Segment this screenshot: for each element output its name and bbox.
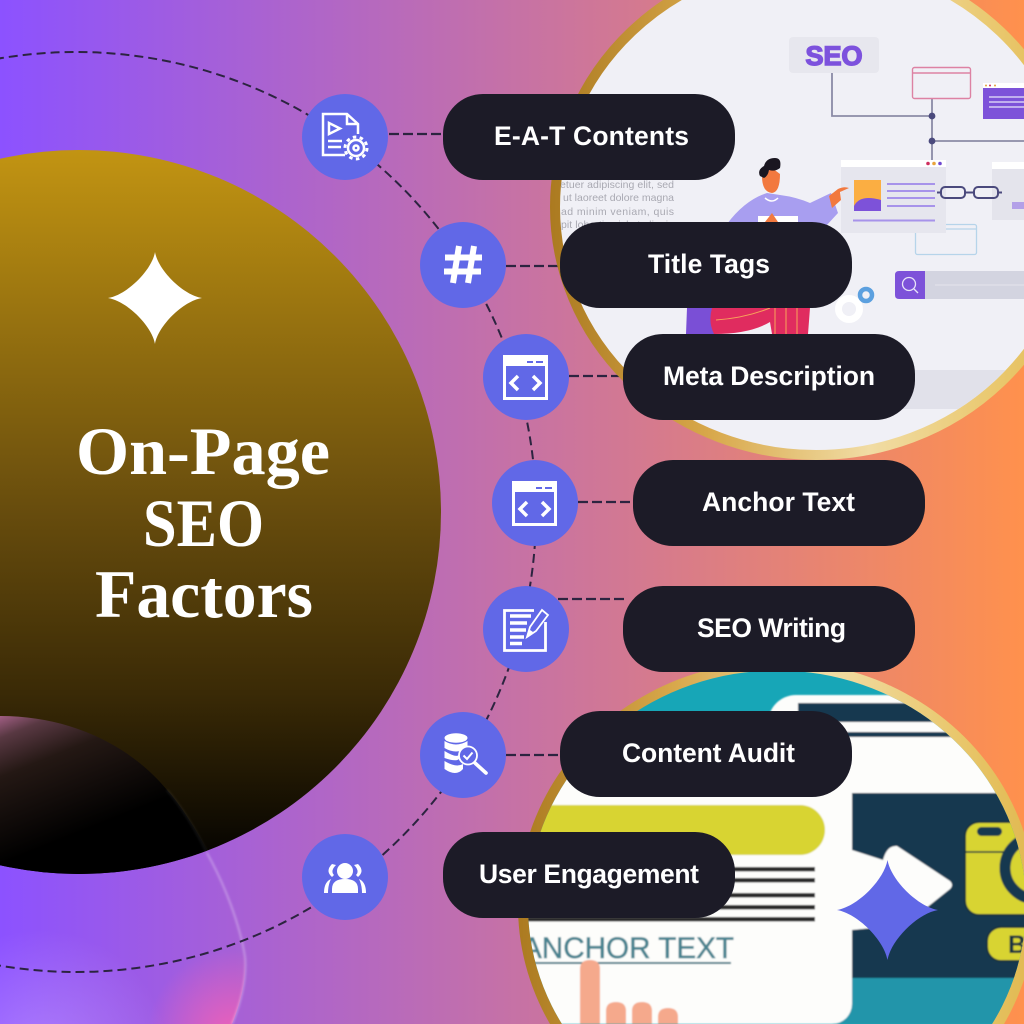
yellow heading bar — [500, 805, 825, 855]
purple window — [983, 83, 1024, 119]
pill: Anchor Text: Anchor Text — [702, 487, 855, 517]
pointing hand — [580, 960, 678, 1024]
blue outline window — [916, 224, 976, 254]
icon circle: user engagement people — [302, 834, 388, 920]
title: On-Page — [76, 413, 330, 489]
lorem ipsum text: ad minim veniam, quis — [561, 206, 674, 218]
pill: SEO Writing — [623, 586, 915, 672]
icon circle: meta description code window — [483, 334, 569, 420]
icon circle: SEO writing notepad — [483, 586, 569, 672]
lorem ipsum text: ut laoreet dolore magna — [563, 192, 674, 204]
pill: User Engagement — [443, 832, 735, 918]
search bar — [895, 271, 1024, 299]
pill: Anchor Text — [633, 460, 925, 546]
pill: Meta Description — [623, 334, 915, 420]
lorem ipsum text: pit lobortis nisl ut aliquip — [561, 219, 674, 231]
icon circle: content audit database — [420, 712, 506, 798]
navy video panel — [852, 793, 1024, 978]
lower teal tone — [834, 978, 1014, 1024]
icon circle: title tags hash — [420, 222, 506, 308]
title: Factors — [95, 556, 313, 632]
dark header bars — [797, 702, 952, 738]
connector dashes — [389, 134, 635, 755]
bottom grey band — [902, 370, 1006, 409]
title: SEO — [143, 485, 264, 561]
main content card — [841, 160, 946, 233]
icon circle: anchor text code window — [492, 460, 578, 546]
SEO label box — [789, 37, 879, 73]
white play arrow — [852, 846, 952, 930]
pill: Meta Description: Meta Description — [663, 361, 875, 391]
pill: E-A-T Contents — [443, 94, 735, 180]
pill: User Engagement: User Engagement — [479, 859, 699, 889]
white web page card — [528, 694, 996, 1024]
glass bubble bottom left — [0, 714, 250, 1024]
lorem ipsum text: etuer adipiscing elit, sed — [560, 179, 674, 191]
blue four-point star — [837, 860, 938, 960]
pill: SEO Writing: SEO Writing — [697, 613, 846, 643]
dashed orbit ring — [0, 52, 536, 972]
camera icon — [965, 822, 1024, 915]
character illustration — [686, 158, 849, 334]
black text lines — [520, 867, 815, 922]
lorem ipsum text — [560, 179, 674, 231]
gears — [838, 289, 872, 320]
pill: Title Tags: Title Tags — [648, 249, 770, 279]
anchor text label: ANCHOR TEXT — [522, 932, 734, 965]
pill: Content Audit: Content Audit — [622, 738, 795, 768]
chain link — [937, 187, 1002, 198]
top illustration circle: SEO workflow — [555, 0, 1024, 455]
pink window — [912, 68, 971, 98]
white four-point star — [108, 252, 202, 344]
title — [76, 413, 330, 632]
SEO label box: SEO — [805, 41, 863, 71]
icon circle: E-A-T contents — [302, 94, 388, 180]
large dark gold circle — [0, 150, 441, 874]
flow lines — [832, 73, 1024, 160]
yellow B button — [987, 927, 1024, 961]
pill: Content Audit — [560, 711, 852, 797]
bottom illustration circle: anchor text — [500, 661, 1024, 1024]
pill: Title Tags — [560, 222, 852, 308]
pill: E-A-T Contents: E-A-T Contents — [494, 121, 689, 151]
right card — [992, 162, 1024, 220]
